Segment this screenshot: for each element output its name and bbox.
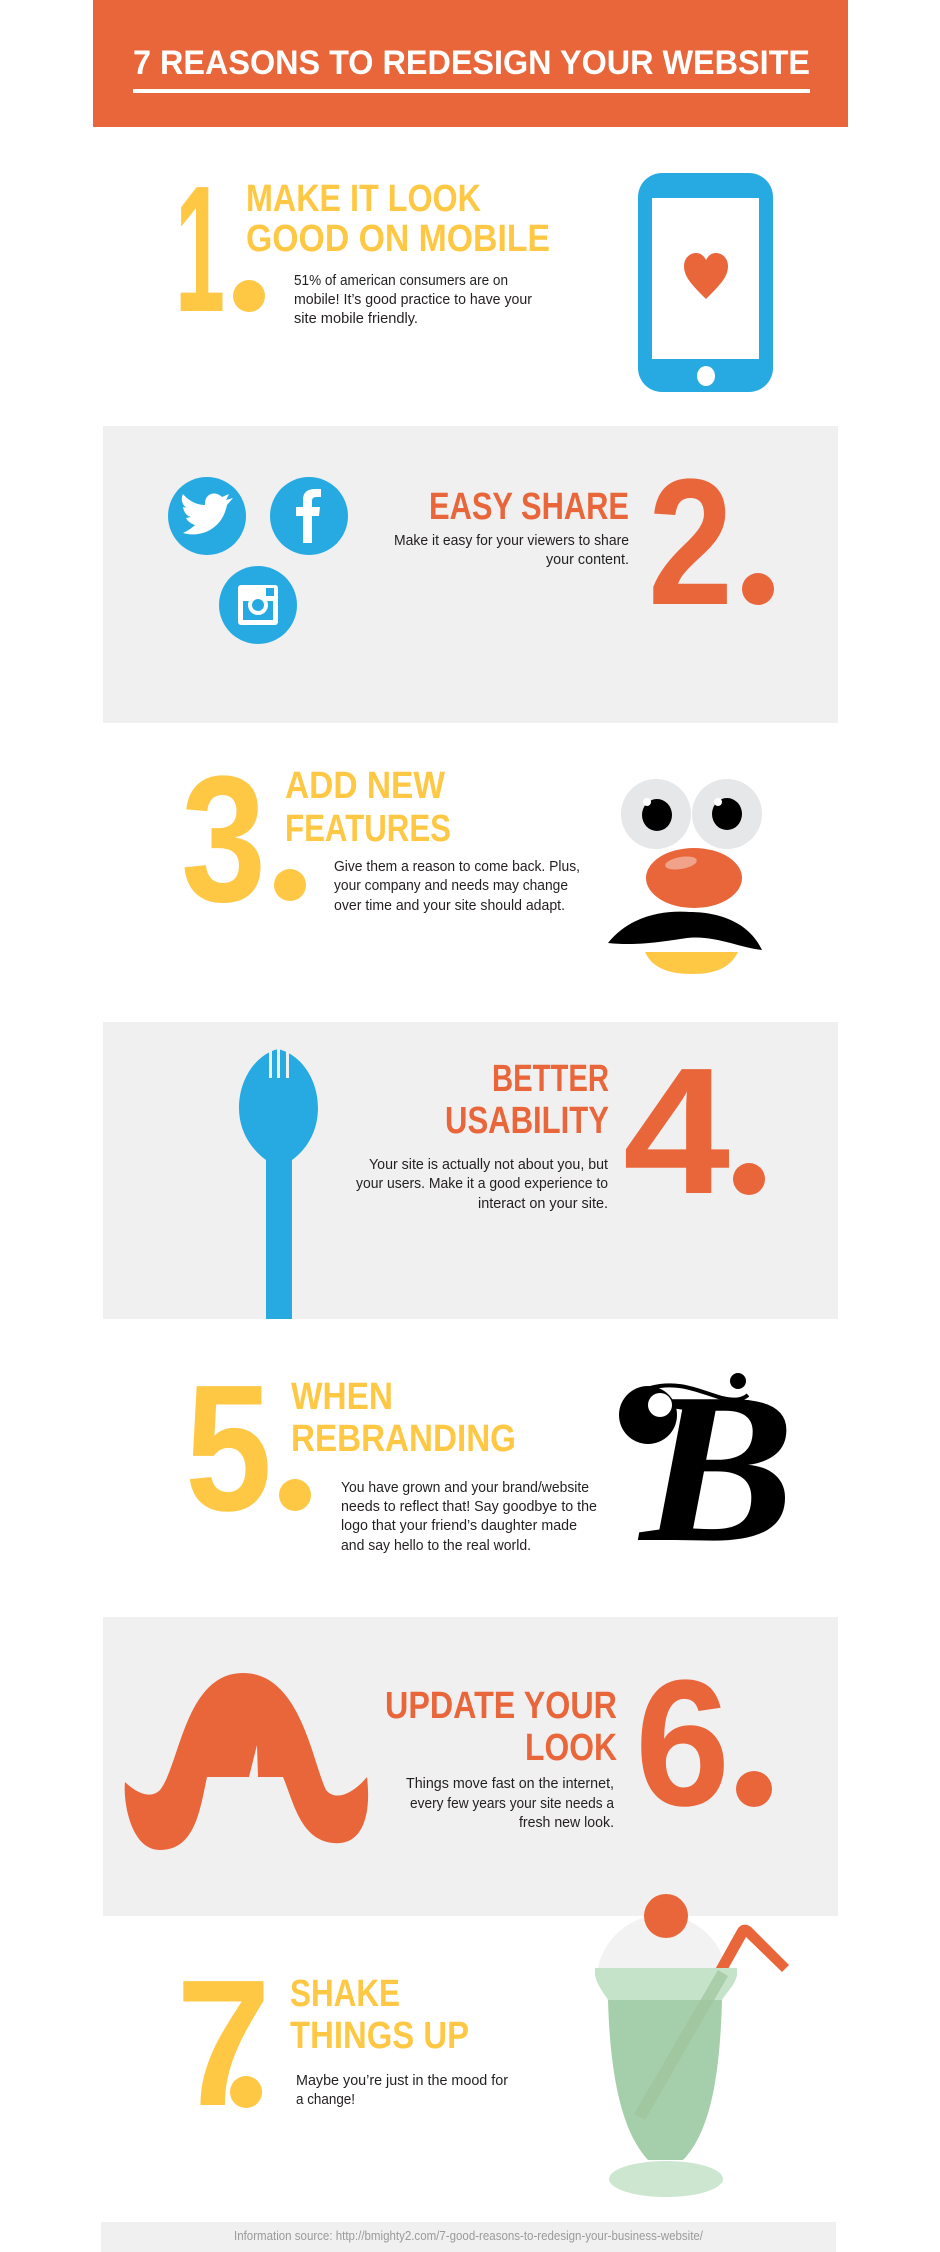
icon: instagram <box>219 566 297 644</box>
icon: milkshake <box>595 1894 789 2197</box>
body 5: and say hello to the real world. <box>341 1537 531 1554</box>
number 5: 5 <box>185 1348 272 1549</box>
heading 1: MAKE IT LOOK <box>246 178 481 220</box>
number 6: 6 <box>635 1643 730 1844</box>
body 5 <box>341 1479 597 1554</box>
number 1: 1 <box>175 149 225 350</box>
body 1: 51% of american consumers are on <box>294 272 508 289</box>
body 7 <box>296 2072 508 2108</box>
body 3 <box>334 858 580 914</box>
section 1: mobile <box>175 149 773 392</box>
number 3: 3 <box>181 739 266 940</box>
body 6: every few years your site needs a <box>410 1795 615 1812</box>
heading 5: REBRANDING <box>291 1418 516 1460</box>
body 4: interact on your site. <box>478 1195 608 1212</box>
section 7: shake things up <box>176 1894 789 2197</box>
icon: spork <box>239 1049 318 1319</box>
heading 3: ADD NEW <box>285 765 445 807</box>
body 2 <box>394 532 629 568</box>
panel 4: better usability <box>103 1022 838 1319</box>
body 1: site mobile friendly. <box>294 310 418 327</box>
heading 7: SHAKE <box>290 1973 400 2015</box>
body 4: your users. Make it a good experience to <box>356 1175 608 1192</box>
heading 3: FEATURES <box>285 808 451 850</box>
heading 7 <box>290 1973 469 2057</box>
body 7: a change! <box>296 2091 355 2108</box>
icon: twitter <box>168 477 246 555</box>
body 3: your company and needs may change <box>334 877 568 894</box>
heading 2: EASY SHARE <box>429 486 629 528</box>
section 5: rebranding <box>185 1348 795 1587</box>
body 2: your content. <box>546 551 629 568</box>
body 7: Maybe you’re just in the mood for <box>296 2072 508 2089</box>
body 6: Things move fast on the internet, <box>406 1775 614 1792</box>
number 2: 2 <box>648 442 733 643</box>
section 3: new features <box>181 739 762 974</box>
body 2: Make it easy for your viewers to share <box>394 532 629 549</box>
icon: orange mustache/hair <box>125 1673 368 1850</box>
icon: facebook <box>270 477 348 555</box>
footer source <box>101 2222 836 2252</box>
title: 7 REASONS TO REDESIGN YOUR WEBSITE <box>133 44 810 82</box>
heading 4 <box>445 1058 609 1142</box>
body 3: over time and your site should adapt. <box>334 897 565 914</box>
panel 6: update your look <box>103 1617 838 1916</box>
icon: phone <box>638 173 773 392</box>
heading 5: WHEN <box>291 1376 393 1418</box>
body 1: mobile! It’s good practice to have your <box>294 291 532 308</box>
panel 2: easy share <box>103 426 838 723</box>
heading 4: BETTER <box>492 1058 609 1100</box>
heading 6: UPDATE YOUR <box>385 1685 617 1727</box>
heading 1 <box>246 178 550 260</box>
body 5: needs to reflect that! Say goodbye to the <box>341 1498 597 1515</box>
heading 7: THINGS UP <box>290 2015 469 2057</box>
heading 3 <box>285 765 451 850</box>
icon: B logo: B <box>638 1348 795 1587</box>
body 1 <box>294 272 532 327</box>
number 4: 4 <box>623 1031 730 1232</box>
heading 6 <box>385 1685 617 1769</box>
header banner <box>93 0 848 127</box>
body 6: fresh new look. <box>519 1814 614 1831</box>
number 7: 7 <box>176 1943 271 2144</box>
body 6 <box>406 1775 615 1831</box>
body 4 <box>356 1156 609 1212</box>
body 5: logo that your friend’s daughter made <box>341 1517 577 1534</box>
body 3: Give them a reason to come back. Plus, <box>334 858 580 875</box>
footer source: Information source: http://bmighty2.com/7-good-reasons-to-redesign-your-business-website/ <box>234 2228 703 2243</box>
heading 6: LOOK <box>525 1727 617 1769</box>
body 4: Your site is actually not about you, but <box>369 1156 609 1173</box>
icon: face <box>608 779 762 974</box>
heading 1: GOOD ON MOBILE <box>246 218 550 260</box>
heading 4: USABILITY <box>445 1100 609 1142</box>
heading 5 <box>291 1376 516 1460</box>
body 5: You have grown and your brand/website <box>341 1479 589 1496</box>
